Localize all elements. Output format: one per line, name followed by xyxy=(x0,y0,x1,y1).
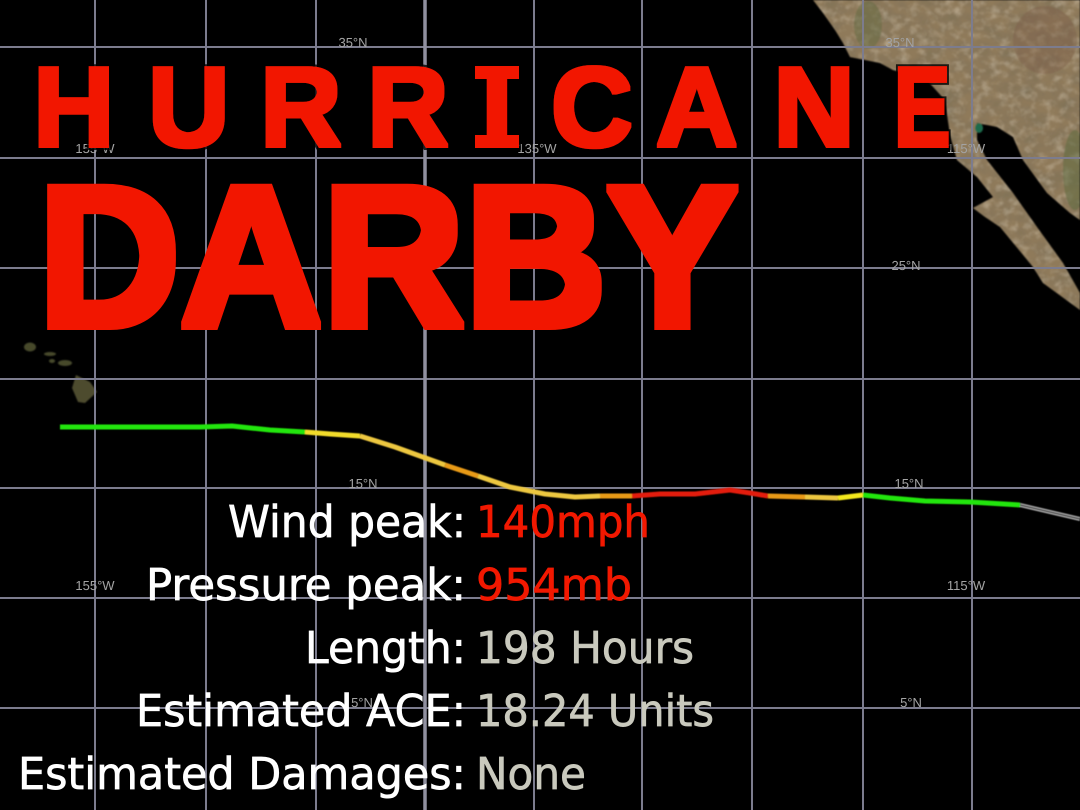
grid coordinate labels: 155°W xyxy=(75,141,115,156)
label: estimated ACE: Estimated ACE: xyxy=(136,686,466,737)
storm track xyxy=(60,426,1080,519)
stats: values xyxy=(476,497,714,800)
satellite map: Hawaiian islands xyxy=(24,342,97,403)
grid coordinate labels: 135°W xyxy=(517,141,557,156)
grid coordinate labels xyxy=(75,35,986,710)
grid coordinate labels: 15°N xyxy=(348,476,378,491)
grid coordinate labels: 5°N xyxy=(351,695,373,710)
label: wind peak: Wind peak: xyxy=(228,497,466,548)
value: estimated damages: None xyxy=(476,749,586,800)
value: length: 198 Hours xyxy=(476,623,694,674)
stats: labels xyxy=(18,497,466,800)
grid coordinate labels: 15°N xyxy=(894,476,924,491)
grid coordinate labels: 115°W xyxy=(947,578,986,593)
title: HURRICANE: HURRICAN xyxy=(33,44,855,170)
grid coordinate labels: 25°N xyxy=(891,258,921,273)
grid coordinate labels: 35°N xyxy=(885,35,915,50)
value: estimated ACE: 18.24 Units xyxy=(476,686,714,737)
grid coordinate labels: 5°N xyxy=(900,695,922,710)
value: pressure peak: 954mb xyxy=(476,560,632,611)
grid coordinate labels: 35°N xyxy=(338,35,368,50)
title: HURRICANE: E xyxy=(894,44,950,170)
grid coordinate labels: 155°W xyxy=(75,578,115,593)
value: wind peak: 140mph xyxy=(476,497,650,548)
grid coordinate labels: 115°W xyxy=(947,141,986,156)
label: length: Length: xyxy=(305,623,466,674)
satellite map: North America land xyxy=(810,0,1080,312)
title: DARBY: DARBY xyxy=(38,144,738,369)
label: pressure peak: Pressure peak: xyxy=(146,560,466,611)
label: estimated damages: Estimated Damages: xyxy=(18,749,466,800)
